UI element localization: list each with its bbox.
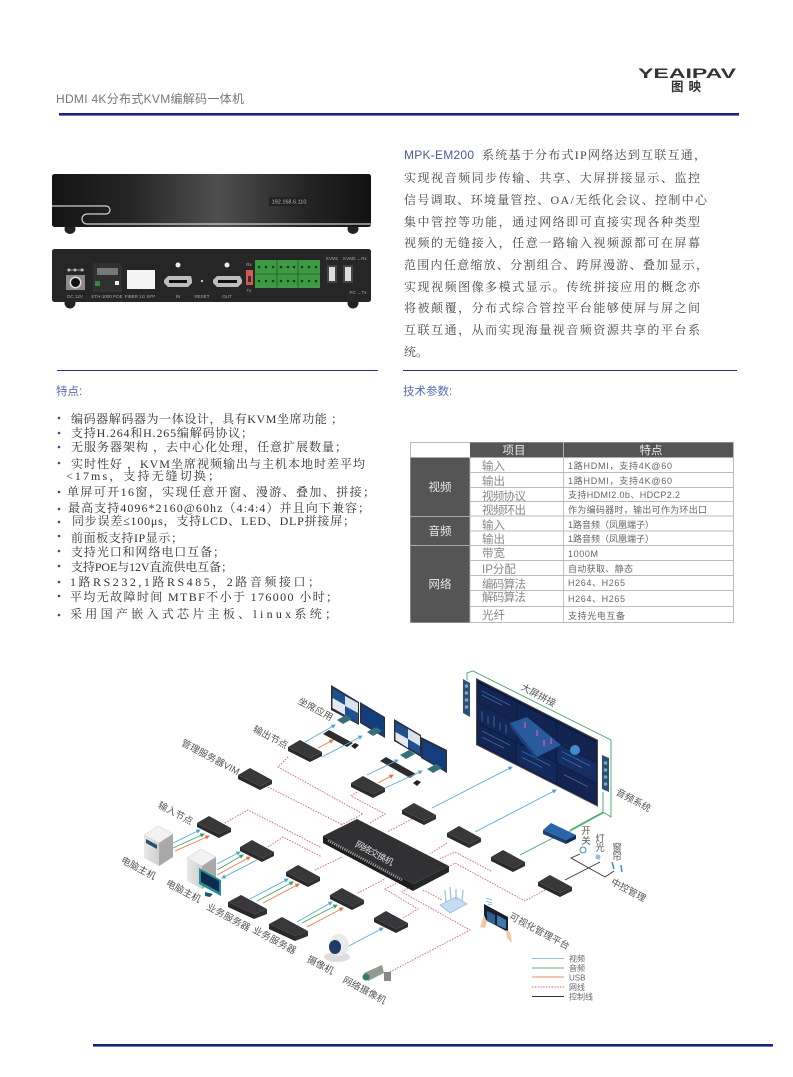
table header cells: 项目: [502, 444, 526, 457]
features list: 编码器解码器为一体设计，具有KVM坐席功能 ；: [71, 411, 343, 426]
product photo: rear panel: FIBER 1G SFP: [125, 294, 155, 299]
network cables: [225, 757, 545, 972]
video wall: [476, 678, 598, 807]
intro paragraph: 实现视频图像多模式显示。传统拼接应用的概念亦: [404, 279, 701, 294]
table rows text: 自动获取、静态: [568, 563, 633, 574]
product photo: rear panel: ETH-1000 POE: [91, 294, 123, 299]
legend: 视频: [569, 954, 585, 964]
camera node: [374, 911, 408, 933]
logo: [638, 66, 736, 94]
table rows text: 带宽: [482, 546, 505, 560]
intro paragraph: 统。: [404, 344, 428, 359]
input node 4: [330, 888, 364, 910]
network switch: 网络交换机: [354, 838, 396, 868]
logo: 图映: [671, 80, 701, 94]
network camera: [362, 965, 391, 981]
table group cells: 视频: [428, 480, 452, 494]
signal arrows: [173, 725, 556, 947]
product photo: front panel: [52, 174, 371, 234]
table rows text: 作为编码器时，输出可作为环出口: [568, 504, 707, 515]
table rows text: 输出: [482, 474, 505, 488]
features list: 同步误差≤100μs，支持LCD、LED、DLP拼接屏；: [72, 513, 355, 528]
computer host 2: [187, 849, 221, 897]
output node: [288, 740, 322, 762]
legend: 音频: [569, 963, 585, 973]
features list: 无服务器架构 ，去中心化处理，任意扩展数量；: [71, 439, 347, 454]
intro paragraph: 信号调取、环境量管控、OA/无纸化会议、控制中心: [404, 192, 708, 207]
table rows text: 1000M: [568, 549, 598, 559]
product photo: rear panel: DC 12V: [67, 294, 83, 299]
label: management server: 管理服务器VIM: [179, 737, 242, 778]
intro paragraph: MPK-EM200: [404, 148, 474, 162]
table group cells: 音频: [428, 524, 452, 538]
wifi router: [440, 887, 467, 913]
features list: 单屏可开16窗，实现任意开窗、漫游、叠加、拼接；: [67, 484, 375, 499]
system diagram: [119, 671, 653, 1007]
table rows text: 1路音频（凤凰端子）: [568, 519, 654, 530]
features list: 支持H.264和H.265编解码协议；: [71, 425, 253, 440]
product photo: rear panel: KVM2 ←Rx: [343, 256, 367, 261]
table rows text: 支持光电互备: [568, 610, 625, 621]
label: network camera: 网络摄像机: [341, 974, 389, 1007]
input node 3: [286, 865, 320, 887]
table rows text: 1路HDMI，支持4K@60: [568, 460, 672, 471]
label: central control: 中控管理: [609, 876, 648, 905]
label: computer host 2: 电脑主机: [164, 877, 203, 906]
product photo: rear panel: PC ←Tx: [349, 290, 367, 295]
product photo: rear panel: [52, 249, 371, 308]
table group cells: 网络: [428, 577, 452, 591]
table rows text: 输入: [482, 459, 505, 473]
table rows text: 1路音频（凤凰端子）: [568, 533, 654, 544]
control labels: 关: [581, 835, 591, 847]
control labels: [581, 826, 622, 863]
section divider left: [57, 370, 378, 371]
input node 1: [197, 816, 231, 838]
intro paragraph: 将被颠覆，分布式综合管控平台能够使屏与屏之间: [404, 300, 700, 315]
label: output node: 输出节点: [251, 723, 290, 752]
table rows text: [482, 459, 707, 622]
product photo: rear panel: RESET: [194, 294, 210, 299]
intro paragraph: 集中管控等功能，通过网络即可直接实现各种类型: [404, 214, 700, 229]
label: business server 2: 业务服务器: [251, 924, 299, 957]
product photo: rear panel: Rx: [246, 262, 252, 267]
control icons: [580, 847, 622, 872]
intro paragraph: [404, 147, 708, 359]
table rows text: IP分配: [482, 563, 516, 576]
video wall speakers and audio wiring: [463, 671, 611, 855]
seat 2 monitors: [394, 719, 447, 773]
heading: tech params: 技术参数:: [403, 384, 452, 398]
product photo: front panel: 192.168.6.110: [272, 200, 306, 206]
features list: 最高支持4096*2160@60hz（4:4:4）并且向下兼容；: [68, 500, 370, 515]
tablet with hands: [480, 898, 512, 943]
table rows text: 光纤: [482, 608, 505, 622]
control labels: 开: [581, 826, 591, 837]
features list: 采用国产嵌入式芯片主板、linux系统；: [70, 606, 337, 621]
table rows text: 1路HDMI，支持4K@60: [568, 475, 672, 486]
product photo: rear panel: Tx: [246, 288, 252, 293]
intro paragraph: 实现视音频同步传输、共享、大屏拼接显示、监控: [404, 170, 700, 185]
seat 1 monitors: [331, 685, 385, 738]
section divider right: [403, 370, 737, 371]
footer rule: [93, 1044, 773, 1047]
table rows text: 输入: [482, 518, 505, 532]
logo: YEAIPAV: [638, 66, 736, 81]
legend: USB: [569, 974, 585, 982]
label: business server 1: 业务服务器: [205, 901, 253, 934]
control node: [538, 875, 572, 897]
label: audio system: 音频系统: [614, 786, 653, 815]
table rows text: 支持HDMI2.0b、HDCP2.2: [568, 489, 680, 500]
features list: 前面板支持IP显示；: [71, 530, 183, 545]
heading: features: 特点:: [56, 384, 82, 398]
intro paragraph: 互联互通，从而实现海量视音频资源共享的平台系: [404, 322, 700, 337]
table rows text: 视频环出: [482, 503, 526, 517]
header title: HDMI 4K分布式KVM编解码一体机: [56, 91, 244, 106]
features list: 支持POE与12V直流供电互备；: [71, 559, 233, 574]
table rows text: 输出: [482, 532, 505, 546]
wall decoder 2: [447, 826, 481, 848]
business server 2: [269, 917, 308, 941]
product photo: rear panel: IN: [176, 294, 180, 299]
spec table: [410, 442, 734, 622]
intro paragraph: 范围内任意缩放、分割组合、跨屏漫游、叠加显示，: [404, 257, 708, 272]
computer host 1: [144, 826, 173, 866]
header rule: [59, 113, 739, 116]
features list: <17ms，支持无缝切换；: [66, 468, 220, 483]
table header cells: 特点: [640, 443, 662, 457]
features list: 平均无故障时间 MTBF不小于 176000 小时；: [70, 589, 338, 604]
blue audio processor: [543, 823, 576, 844]
central control wiring: [565, 854, 614, 880]
label: camera: 摄像机: [305, 953, 336, 978]
control labels: 帘: [612, 851, 622, 863]
business server 1: [228, 895, 267, 919]
audio node: [491, 850, 525, 872]
intro paragraph: 视频的无缝接入，任意一路输入视频源都可在屏幕: [404, 235, 700, 250]
label: seat application: 坐席应用: [296, 695, 335, 724]
features list: [58, 411, 375, 621]
control labels: 灯: [595, 834, 605, 845]
features list: 实时性好 ，KVM坐席视频输出与主机本地时差平均: [71, 456, 365, 471]
product photo: rear panel: OUT: [222, 294, 232, 299]
table grid: [470, 442, 734, 622]
table rows text: 视频协议: [482, 489, 526, 503]
table rows text: 编码算法: [482, 577, 526, 591]
seat 1 keyboard: [323, 730, 359, 749]
label: visual management platform: 可视化管理平台: [507, 910, 572, 952]
table group cells: [410, 458, 470, 622]
control labels: 窗: [612, 842, 622, 854]
table header cells: [470, 442, 734, 458]
legend: [532, 954, 593, 1002]
label: input node: 输入节点: [156, 799, 195, 828]
legend: 控制线: [569, 992, 593, 1002]
features list: 支持光口和网络电口互备；: [71, 544, 225, 559]
legend: 网线: [569, 982, 585, 992]
input node 2: [240, 840, 274, 862]
table rows text: H264、H265: [568, 578, 625, 588]
control labels: 光: [595, 842, 605, 854]
seat 2 keyboard: [380, 757, 421, 786]
label: video wall: 大屏拼接: [519, 681, 558, 710]
label: computer host 1: 电脑主机: [119, 854, 158, 883]
management server VIM: [238, 768, 272, 790]
camera: [324, 934, 350, 962]
table rows text: H264、H265: [568, 594, 625, 604]
network switch: [323, 819, 449, 891]
features list: 1路RS232,1路RS485，2路音频接口；: [70, 574, 320, 589]
output node 2: [351, 776, 385, 798]
intro paragraph: 系统基于分布式IP网络达到互联互通，: [482, 147, 706, 162]
table rows text: 解码算法: [482, 590, 526, 604]
product photo: rear panel: KVM1: [326, 256, 339, 261]
wall decoder 1: [402, 803, 436, 825]
